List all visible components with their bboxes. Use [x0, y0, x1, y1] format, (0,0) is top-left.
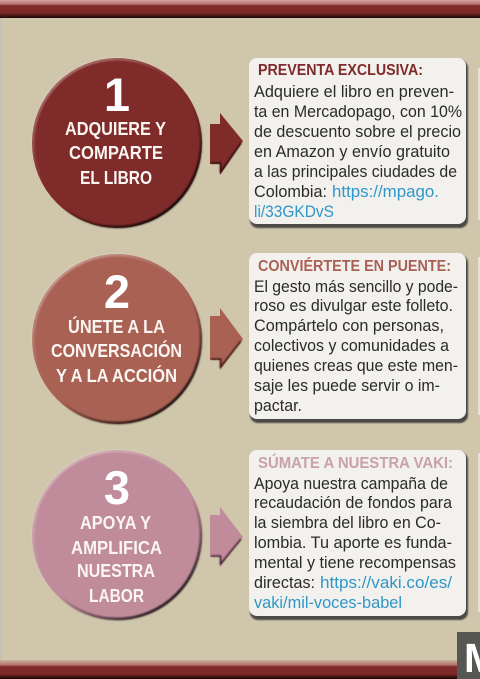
- panel 2 body: Compártelo con personas,: [254, 316, 444, 335]
- panel 1 body: https://mpago.: [332, 182, 439, 201]
- panel 2: [249, 253, 468, 423]
- panel 1 body: en Amazon y envío gratuito: [254, 142, 450, 161]
- label 2: CONVERSACIÓN: [51, 340, 182, 361]
- panel 3 body: recaudación de fondos para: [254, 493, 453, 512]
- cropped dark label: [457, 632, 480, 679]
- panel 2 body: roso es divulgar este folleto.: [254, 296, 453, 315]
- label 1: ADQUIERE Y: [65, 119, 166, 139]
- label 3: [71, 513, 162, 606]
- label 3: APOYA Y: [80, 513, 151, 533]
- panel 3 body: la siembra del libro en Co-: [254, 513, 441, 532]
- step 2 circle: [32, 254, 202, 424]
- panel 2 body: saje les puede servir o im-: [254, 376, 440, 395]
- panel 3 body: directas:: [254, 573, 315, 592]
- top bar: [0, 0, 480, 18]
- step 3 circle: [32, 450, 202, 620]
- panel 1 body: Colombia:: [254, 182, 327, 201]
- right page edge slivers: [478, 68, 480, 612]
- bottom bar: [0, 660, 480, 679]
- panel 2 body: El gesto más sencillo y pode-: [254, 277, 458, 296]
- panel 1 body: Adquiere el libro en preven-: [254, 82, 454, 101]
- panel 2 body: pactar.: [254, 396, 302, 415]
- panel 2 body: quienes creas que este men-: [254, 356, 458, 375]
- panel 1 body: de descuento sobre el precio: [254, 122, 461, 141]
- panel 3 body: Apoya nuestra campaña de: [254, 474, 448, 493]
- panel 2 body: colectivos y comunidades a: [254, 336, 450, 355]
- panel 1 body: a las principales ciudades de: [254, 162, 457, 181]
- panel 1: [249, 58, 468, 228]
- panel 3 body: https://vaki.co/es/: [320, 573, 452, 592]
- panel 2 body: [254, 277, 458, 415]
- panel 1 heading: PREVENTA EXCLUSIVA:: [258, 62, 423, 79]
- panel 3 body: mental y tiene recompensas: [254, 553, 456, 572]
- arrow 2: [210, 308, 243, 370]
- panel 1 body: li/33GKDvS: [254, 202, 334, 221]
- number 2: 2: [104, 265, 130, 318]
- label 3: NUESTRA: [77, 561, 155, 581]
- number 1: 1: [104, 68, 130, 121]
- arrow 3: [210, 507, 243, 567]
- panel 3 body: lombia. Tu aporte es funda-: [254, 533, 452, 552]
- panel 3 body: [254, 474, 456, 612]
- label 3: AMPLIFICA: [71, 538, 162, 558]
- panel 3 body: vaki/mil-voces-babel: [254, 593, 402, 612]
- number 3: 3: [104, 461, 130, 514]
- panel 2 heading: CONVIÉRTETE EN PUENTE:: [258, 256, 451, 275]
- label 3: LABOR: [89, 586, 144, 606]
- panel 1 body: ta en Mercadopago, con 10%: [254, 102, 462, 121]
- panel 3 heading: SÚMATE A NUESTRA VAKI:: [258, 453, 453, 472]
- label 1: [65, 119, 166, 188]
- left edge stripe: [0, 18, 2, 660]
- label 1: COMPARTE: [69, 143, 163, 163]
- panel 3: [249, 450, 468, 620]
- label 2: ÚNETE A LA: [68, 316, 165, 337]
- panel 1 body: [254, 82, 462, 221]
- arrow 1: [210, 113, 243, 175]
- label 2: [51, 316, 182, 386]
- label 1: EL LIBRO: [80, 168, 152, 188]
- step 1 circle: [32, 58, 202, 228]
- label 2: Y A LA ACCIÓN: [56, 365, 177, 386]
